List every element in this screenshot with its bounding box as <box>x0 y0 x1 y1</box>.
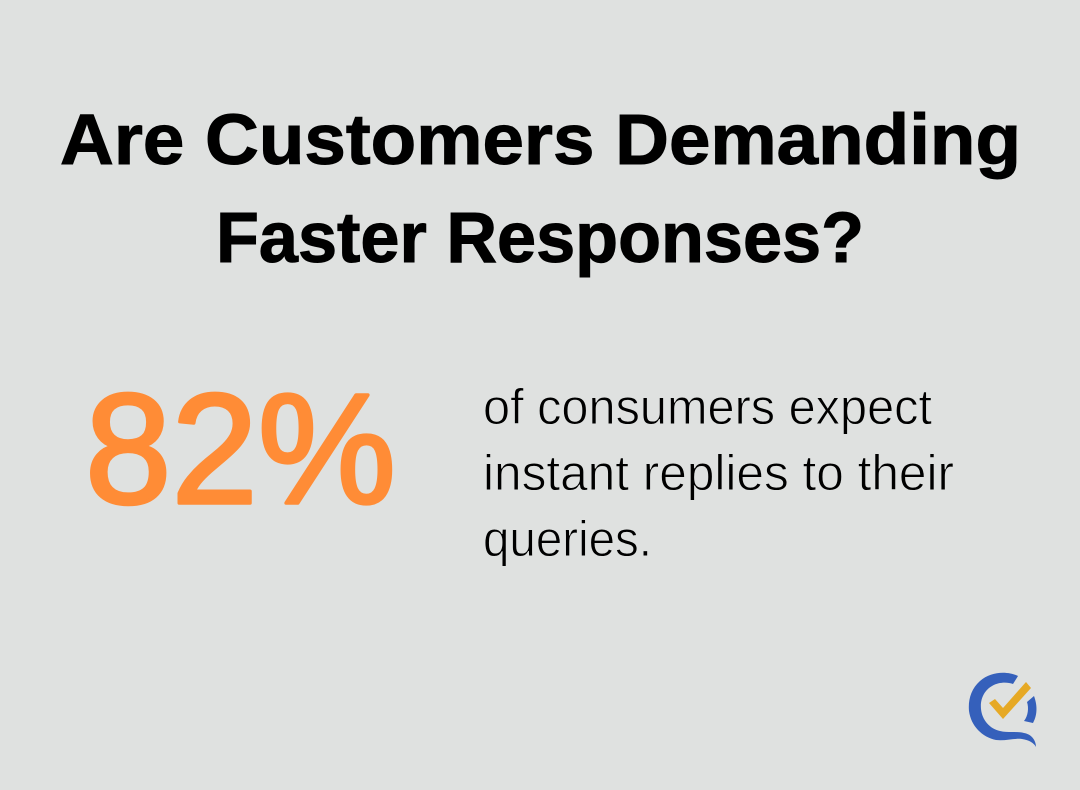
logo check mark <box>989 682 1031 719</box>
title: Are Customers Demanding <box>60 101 1021 180</box>
title: Faster Responses? <box>216 199 864 278</box>
statistic description: of consumers expect <box>483 379 932 435</box>
logo right arc <box>1024 696 1036 723</box>
icon: chat bubble check logo <box>969 673 1036 747</box>
statistic description: queries. <box>483 511 652 567</box>
statistic description <box>483 379 954 567</box>
title <box>60 101 1021 278</box>
statistic: 82%: 82% <box>85 362 396 537</box>
statistic description: instant replies to their <box>483 445 954 501</box>
logo ring and tail <box>969 673 1036 747</box>
